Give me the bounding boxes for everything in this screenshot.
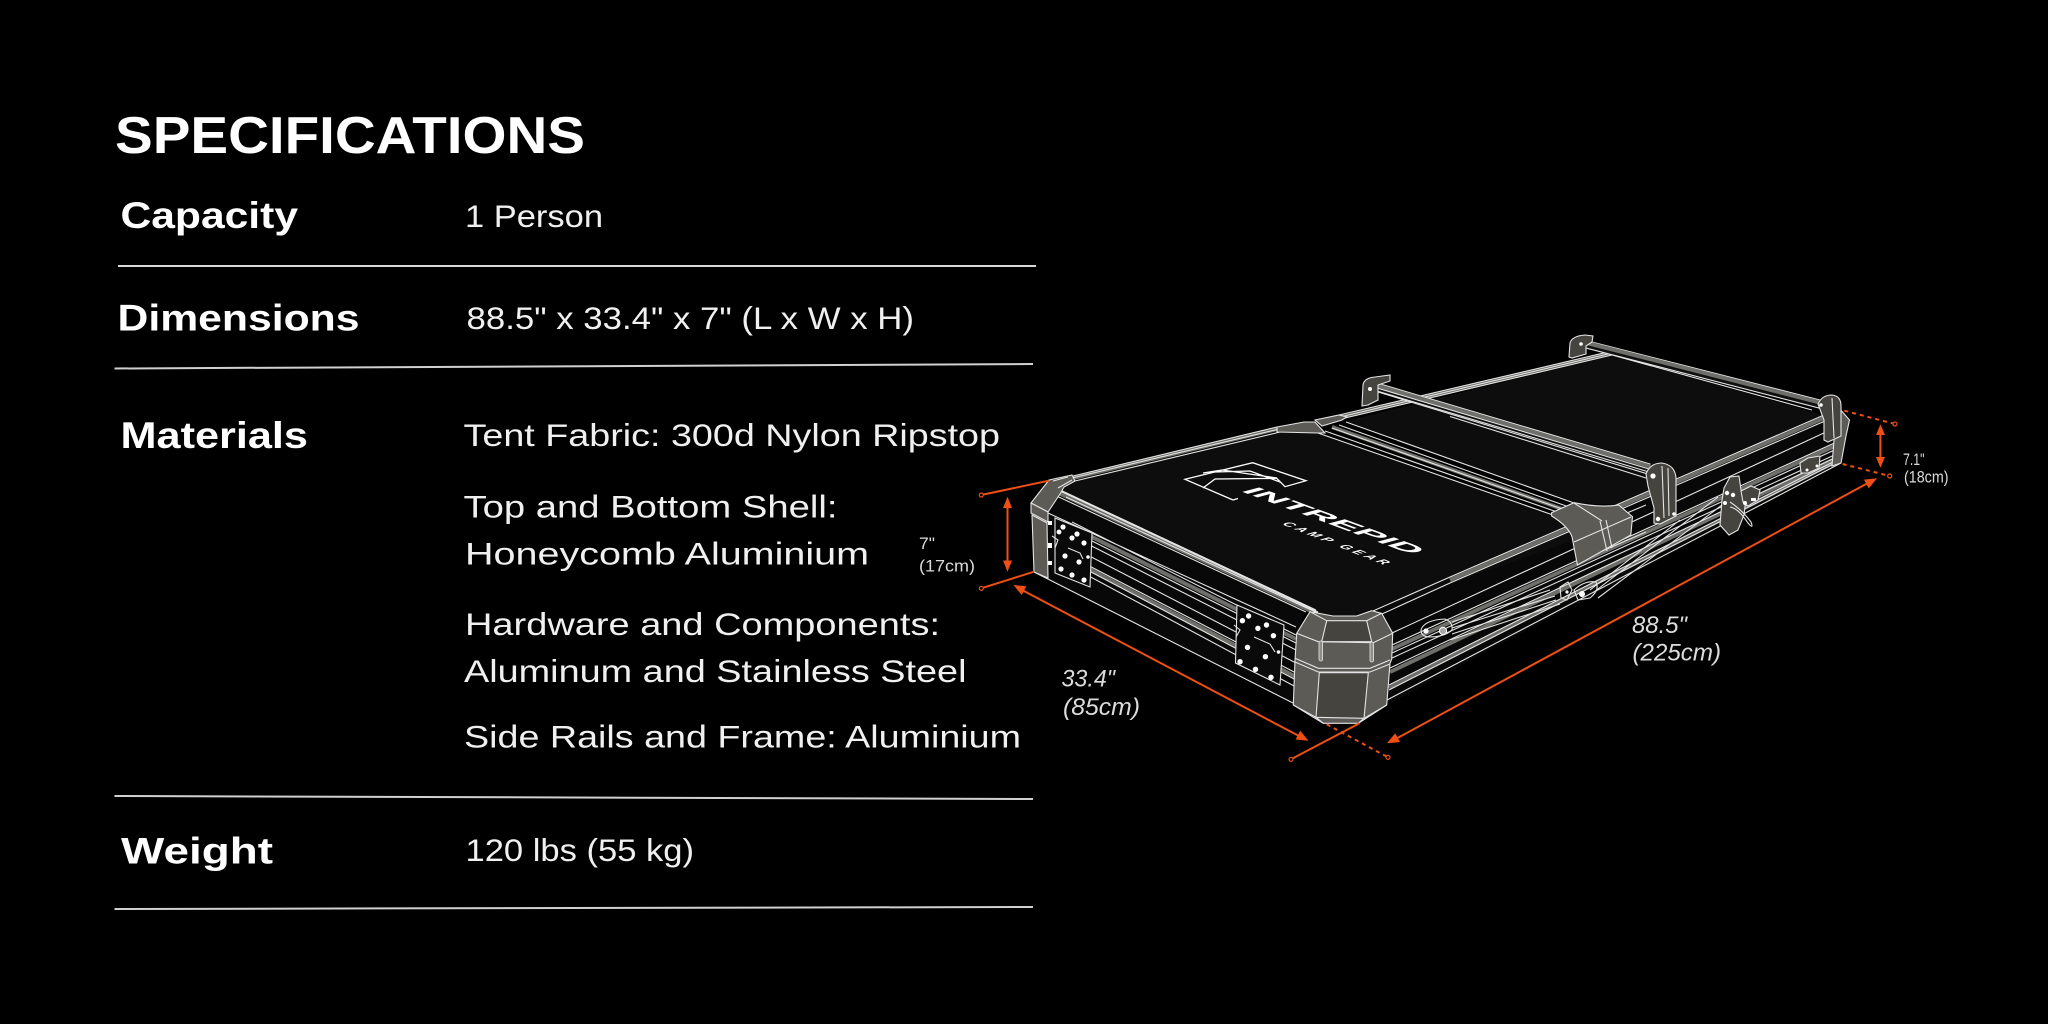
right side face bbox=[1373, 415, 1841, 705]
spec row: materials: Tent Fabric: 300d Nylon Ripstop bbox=[464, 417, 1000, 453]
product diagram: closed rooftop tent case bbox=[1031, 335, 1850, 723]
rail brackets bbox=[1362, 335, 1841, 524]
dimension: height left 7 inch: 7" bbox=[919, 534, 935, 553]
left hinge plate bbox=[1048, 518, 1092, 587]
title: SPECIFICATIONS bbox=[115, 107, 585, 165]
spec row: capacity bbox=[120, 195, 603, 236]
spec row: materials: Side Rails and Frame: Aluminium bbox=[464, 718, 1021, 754]
spec row: materials: Materials bbox=[120, 415, 308, 456]
top panel: rear section bbox=[1346, 355, 1823, 505]
dimension: height right 7.1 inch bbox=[1843, 411, 1948, 486]
front carry rail bbox=[1377, 383, 1650, 474]
dimension: width 33.4 inch: 33.4" bbox=[1062, 666, 1116, 692]
spec row: dimensions: 88.5" x 33.4" x 7" (L x W x H) bbox=[466, 300, 914, 336]
dimension: length 88.5 inch bbox=[1387, 478, 1877, 743]
top panel: front section bbox=[1062, 432, 1574, 617]
spec row: capacity: 1 Person bbox=[465, 198, 603, 234]
spec row: materials: Aluminum and Stainless Steel bbox=[464, 653, 966, 689]
spec row: materials: Top and Bottom Shell: bbox=[464, 488, 838, 524]
spec row: weight bbox=[121, 830, 694, 872]
spec row: materials bbox=[120, 415, 1021, 754]
dimension: width 33.4 inch bbox=[1013, 585, 1390, 761]
spec row: dimensions bbox=[118, 298, 914, 338]
side latch bbox=[1720, 476, 1760, 535]
strap buckle: near bbox=[1421, 619, 1452, 637]
spec row: dimensions: Dimensions bbox=[118, 298, 360, 338]
left side face bbox=[1032, 492, 1304, 703]
mid-section grey hinge cap bbox=[1277, 415, 1632, 565]
dimension: length 88.5 inch: 88.5" bbox=[1632, 612, 1688, 639]
spec row: weight: Weight bbox=[121, 830, 273, 872]
dimension: length 88.5 inch: (225cm) bbox=[1632, 640, 1721, 666]
rear carry rail bbox=[1584, 340, 1820, 410]
spec row: capacity: Capacity bbox=[120, 195, 298, 236]
far end cap bbox=[1832, 408, 1850, 466]
dimension: height right 7.1 inch: (18cm) bbox=[1904, 468, 1948, 486]
right hinge plate bbox=[1234, 605, 1284, 685]
dimension: height right 7.1 inch: 7.1" bbox=[1903, 450, 1924, 469]
top panel rim lines bbox=[1048, 351, 1825, 615]
spec row: materials: Hardware and Components: bbox=[465, 606, 940, 642]
dimension: height left 7 inch: (17cm) bbox=[919, 556, 975, 576]
spec row: materials: Honeycomb Aluminium bbox=[465, 536, 869, 572]
front corner cap bbox=[1293, 611, 1393, 723]
spec row: weight: 120 lbs (55 kg) bbox=[466, 832, 694, 868]
dimension: height left 7 inch bbox=[919, 481, 1049, 590]
strap buckle: middle bbox=[1560, 582, 1597, 600]
side bracket: far bbox=[1800, 456, 1820, 473]
side straps bbox=[1450, 497, 1722, 640]
logo mark bbox=[1185, 463, 1306, 500]
left corner cap bbox=[1031, 475, 1075, 578]
logo wordmark: INTREPID: INTREPID bbox=[1234, 485, 1433, 556]
logo wordmark: CAMP GEAR: CAMP GEAR bbox=[1278, 521, 1395, 566]
dimension: width 33.4 inch: (85cm) bbox=[1063, 694, 1140, 721]
